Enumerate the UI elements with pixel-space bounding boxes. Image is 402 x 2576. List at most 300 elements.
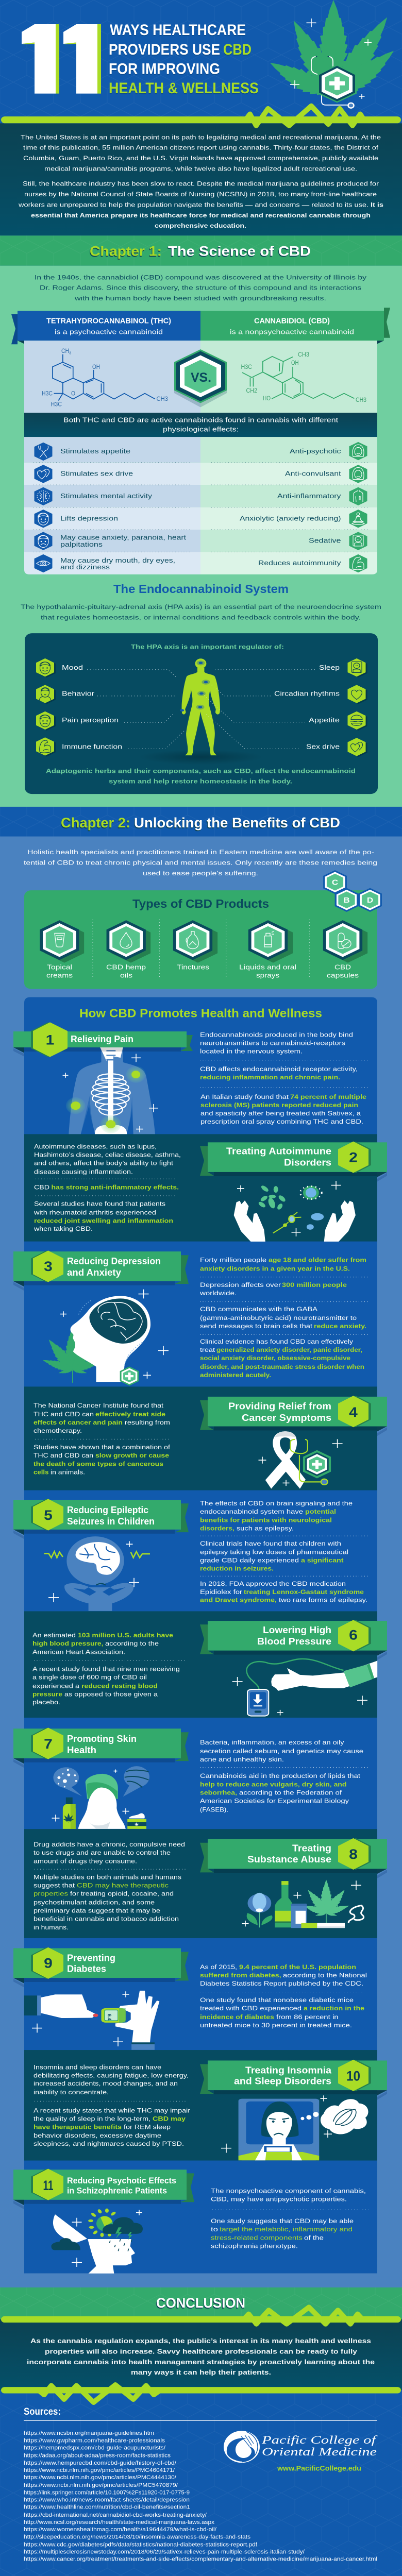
source list: https://link.springer.com/article/10.1007%2Fs11920-017-0775-9 (24, 2490, 190, 2496)
ribbon 8: substance abuse: 8 (349, 1846, 358, 1862)
section 9 illustration: glucose meter and hands: 6.4 (106, 2014, 112, 2021)
panel: THC vs CBD comparison (11, 308, 390, 574)
section 11 text: One study suggests that CBD may be able (211, 2217, 354, 2225)
sources panel (0, 2390, 402, 2576)
ribbon 10: insomnia: and Sleep Disorders (234, 2076, 331, 2087)
Pacific College logo: www.PacificCollege.edu (277, 2464, 361, 2472)
section 3 ribbon: depression and anxiety: 3 (44, 1259, 53, 1275)
section 3 text: (gamma-aminobutyric acid) neurotransmitter to (200, 1314, 357, 1321)
section 8 text: properties (34, 1890, 68, 1897)
section 1 text: Endocannabinoids produced in the body bind (200, 1031, 353, 1038)
section 5 text: endocannabinoid system have (200, 1508, 303, 1515)
section 8 text (34, 1841, 187, 1931)
CBD hex letters: B (343, 896, 350, 905)
section 10 text: inability to concentrate. (34, 2089, 109, 2096)
THC molecule diagram: H3C (51, 401, 62, 408)
regulator labels: Mood (62, 664, 83, 672)
ribbon 1: relieving pain (13, 1022, 193, 1057)
caption band: Both THC and CBD are active cannabinoids found in cannabis with different (63, 416, 338, 424)
ribbon 10: insomnia (200, 2060, 387, 2100)
section 8 text: to use drugs and are unable to control the (34, 1849, 171, 1856)
section 11 ribbon: schizophrenia: in Schizophrenic Patients (67, 2185, 167, 2195)
chapter 1 banner (0, 235, 402, 266)
section 6 text: as opposed to those given a (64, 1690, 158, 1698)
section 5 text: a significant (301, 1556, 344, 1564)
section 3 text: CBD communicates with the GABA (200, 1306, 317, 1313)
product labels: Topical (47, 963, 72, 971)
chapter 1 intro text: Dr. Roger Adams. Since this discovery, the structure of this compound and its interactions (40, 284, 361, 292)
source list: https://www.hempurecbd.com/cbd-guide/history-of-cbd/ (24, 2460, 177, 2466)
regulator labels: Pain perception (62, 717, 119, 724)
THC molecule diagram: H3C (42, 390, 53, 397)
section 5 text: Epidiolex for (200, 1588, 243, 1596)
section 10 text: the quality of sleep in the long-term, (34, 2115, 150, 2122)
section 1 text (200, 1031, 369, 1125)
conclusion text (27, 2337, 375, 2377)
section 3 text: Forty million people (200, 1256, 266, 1263)
section 4 illustration: awareness ribbon and stethoscope (259, 1431, 343, 1489)
heartbeat divider 3 (1, 2385, 401, 2402)
section 6 text: a single dose of 600 mg of CBD oil (32, 1673, 147, 1681)
product hex icons (40, 920, 367, 963)
products heading: Types of CBD Products (132, 897, 269, 910)
Pacific College logo: Oriental Medicine (262, 2446, 377, 2459)
THC molecule diagram: 3 (69, 351, 71, 355)
section 1 text: An Italian study found that (200, 1093, 289, 1100)
CBD molecule diagram (241, 351, 366, 403)
section 9 text: untreated mice to 30 percent in treated mice. (200, 2022, 352, 2029)
section 4 text: cells (34, 1468, 48, 1476)
product labels: capsules (327, 972, 359, 979)
THC effects list: Stimulates mental activity (60, 493, 153, 500)
section 1 text: sclerosis (MS) patients reported reduced pain (200, 1101, 358, 1109)
section 10 text: for REM sleep (124, 2123, 171, 2130)
caption band: physiological effects: (163, 426, 239, 433)
section 4 text: effects of cancer and pain (34, 1419, 123, 1426)
intro paragraph 1: time of this publication, 55 million American citizens report using cannabis. Thirty-four states, the District of (23, 144, 378, 151)
CBD hex letters: C (332, 878, 339, 887)
HPA heading: The HPA axis is an important regulator of: (131, 643, 284, 650)
intro paragraph 2: Still, the healthcare industry has been slow to react. Despite the medical marijuana guidelines produced for (23, 180, 379, 188)
section 11 text (211, 2187, 368, 2250)
THC ribbon header: TETRAHYDROCANNABINOL (THC) (46, 316, 171, 325)
ribbon 6: blood pressure: Blood Pressure (257, 1636, 331, 1647)
title: CBD (223, 41, 252, 58)
section 1 text: neurotransmitters to cannabinoid-receptors (200, 1039, 345, 1046)
intro paragraph 2: It is (371, 201, 383, 208)
intro paragraph 2: essential that America prepare its healthcare force for medical and recreational cannabis through (31, 212, 371, 219)
ribbon 2: autoimmune (200, 1142, 387, 1182)
THC effects list: and dizziness (60, 564, 110, 571)
ribbon 4: cancer symptoms (200, 1396, 387, 1436)
title: WAYS HEALTHCARE (110, 22, 246, 39)
chapter 1 intro text: with the human body have been studied with groundbreaking results. (74, 295, 326, 302)
CBD ribbon header: CANNABIDIOL (CBD) (254, 316, 330, 325)
section 1 text: and spasticity after being treated with Sativex, a (200, 1110, 361, 1117)
heartbeat divider 1 (1, 106, 401, 126)
section 7 illustration: skincare woman (52, 1766, 149, 1829)
conclusion banner (0, 2287, 402, 2319)
Pacific College logo: Pacific College of (261, 2434, 378, 2447)
section 7 text: according to the Federation of (239, 1789, 342, 1797)
title (109, 22, 259, 96)
section 11 text: CBD, may have antipsychotic properties. (211, 2195, 347, 2202)
source list: https://adaa.org/about-adaa/press-room/facts-statistics (24, 2453, 171, 2459)
section 5 illustration: head with brain and seizure waves (44, 1536, 150, 1611)
section 11 ribbon: schizophrenia (13, 2169, 194, 2209)
source list: https://cbd-international.net/cannabidiol-cbd-works-treating-anxiety/ (24, 2512, 207, 2518)
section 5 ribbon: epileptic seizures: 5 (44, 1508, 53, 1523)
section 1 text: located in the nervous system. (200, 1047, 303, 1055)
section 5 ribbon: epileptic seizures: Reducing Epileptic (67, 1505, 148, 1516)
chapter 1 heading: Chapter 1: (90, 244, 162, 259)
regulator labels: Behavior (62, 690, 94, 698)
big number 11 (22, 24, 101, 94)
THC effects list: Stimulates appetite (60, 448, 130, 455)
section 4 text: THC and CBD can (34, 1452, 93, 1459)
section 9 ribbon: diabetes (13, 1947, 189, 1988)
section 4 text: THC and CBD can (34, 1411, 94, 1418)
section 3 ribbon: depression and anxiety: and Anxiety (67, 1267, 121, 1278)
section 9 text: a reduction in the (304, 2005, 364, 2012)
section 8 text: psychostimulant addiction, and some (34, 1899, 155, 1906)
CBD effects list: Anti-psychotic (290, 448, 341, 455)
ribbon 8: substance abuse: Treating (292, 1843, 331, 1854)
section 4 text: slow growth or cause (95, 1452, 169, 1459)
section heading: How CBD Promotes Health and Wellness (79, 1007, 322, 1020)
CBD ribbon header (200, 308, 390, 344)
ribbon 4: cancer symptoms: Providing Relief from (228, 1401, 331, 1412)
section 9 text: Diabetes Statistics Report published by the CDC. (200, 1980, 363, 1987)
ribbon 6: blood pressure: 6 (349, 1628, 358, 1643)
chapter 2 heading: Unlocking the Benefits of CBD (134, 815, 340, 831)
CBD effects list (240, 448, 342, 567)
section 7 text: secretion called sebum, and genetics may cause (200, 1748, 363, 1755)
ribbon 6: blood pressure (200, 1620, 387, 1660)
source list: http://www.ncsl.org/research/health/state-medical-marijuana-laws.aspx (24, 2520, 214, 2526)
section 5 text: grade CBD daily experienced (200, 1556, 299, 1564)
section 6 panel (24, 1611, 387, 1718)
section 11 text: stress-related components (211, 2234, 303, 2242)
section 3 text: treat (200, 1346, 215, 1353)
section 8 text: preliminary data suggest that it may be (34, 1907, 160, 1914)
source list: https://www.ncbi.nlm.nih.gov/pmc/articles/PMC4604171/ (24, 2468, 175, 2473)
title: HEALTH & WELLNESS (109, 80, 259, 96)
adaptogenic text: Adaptogenic herbs and their components, such as CBD, affect the endocannabinoid (46, 767, 356, 774)
section 5 text: benefits for patients with neurological (200, 1516, 332, 1523)
section 10 text: Insomnia and sleep disorders can have (34, 2063, 161, 2071)
intro paragraph 1: Columbia, Guam, Puerto Rico, and the U.S. Virgin Islands have approved comprehensive, publicly available (23, 155, 378, 162)
caption band (24, 413, 377, 437)
section 10 text: A recent study states that while THC may impair (34, 2107, 191, 2114)
section 8 text: amount of drugs they consume. (34, 1857, 137, 1865)
ribbon 2: autoimmune: Disorders (284, 1158, 331, 1168)
section 4 text: Studies have shown that a combination of (34, 1444, 170, 1451)
product labels: oils (120, 972, 132, 979)
source list: https://www.ncbi.nlm.nih.gov/pmc/articles/PMC4444130/ (24, 2475, 177, 2481)
CBD ribbon header: is a nonpsychoactive cannabinoid (230, 328, 354, 336)
section 8 text: Multiple studies on both animals and humans (34, 1873, 181, 1880)
section 5 text: two rare forms of epilepsy. (279, 1596, 367, 1604)
regulator labels: Appetite (309, 717, 340, 724)
chapter 2 intro text: tential of CBD to treat chronic physical and mental issues. Only recently are these remedies being (24, 859, 377, 866)
section 8 text: beneficial in cannabis and tobacco addiction (34, 1915, 179, 1922)
product labels: Tinctures (177, 963, 209, 971)
CBD molecule diagram: OH (291, 360, 299, 366)
section 6 text: experienced a (32, 1682, 80, 1689)
section 9 text: 9.4 percent of the U.S. population (239, 1963, 356, 1971)
section 5 text (200, 1500, 368, 1604)
source list: https://hempmedspx.com/cbd-guide-acupuncturists/ (24, 2445, 166, 2451)
CBD molecule diagram: CH2 (246, 387, 257, 394)
section 3 text: anxiety disorders in a given year in the U.S. (200, 1265, 350, 1272)
VS badge (174, 349, 227, 407)
endocannabinoid system heading: The Endocannabinoid System (113, 583, 289, 596)
right regulators icons (347, 658, 367, 757)
section 11 text: of the (304, 2234, 324, 2242)
section 11 ribbon: schizophrenia: 11 (43, 2178, 53, 2194)
chapter 1 heading: The Science of CBD (168, 244, 311, 259)
section 3 text: generalized anxiety disorder, panic disorder, (216, 1346, 362, 1353)
section 4 text: effectively treat side (95, 1411, 165, 1418)
section 7 ribbon: skin health (13, 1727, 189, 1768)
VS badge: VS. (191, 370, 211, 384)
intro paragraph 2: nurses by the National Council of State Boards of Nursing (NCSBN) in 2018, too many front-line healthcare (24, 191, 377, 198)
section 3 text: reduce anxiety. (314, 1323, 366, 1330)
section 7 text: American Societies for Experimental Biology (200, 1797, 349, 1804)
CBD molecule diagram: H3C (241, 364, 252, 370)
section 7 text: acne and unhealthy skin. (200, 1756, 284, 1763)
section 3 text (199, 1256, 368, 1379)
section 10 text: CBD may (153, 2115, 186, 2122)
section 3 text: disorder, and post-traumatic stress disorder when (200, 1363, 364, 1370)
section 3 illustration: head with brain and leaf (41, 1290, 169, 1386)
section 9 text: As of 2015, (200, 1963, 237, 1971)
section 3 text: worldwide. (199, 1290, 237, 1297)
section 3 text: social anxiety disorder, obsessive-compulsive (200, 1354, 350, 1362)
ribbon 8: substance abuse (200, 1838, 387, 1878)
source list: https://www.gwpharm.com/healthcare-professionals (24, 2438, 165, 2444)
section 6 text: An estimated (32, 1632, 76, 1639)
section 2 text: has strong anti-inflammatory effects. (51, 1183, 179, 1191)
ribbon 10: insomnia: Treating Insomnia (245, 2065, 332, 2076)
section 10 text (34, 2063, 191, 2147)
source list: https://www.cancer.org/treatment/treatments-and-side-effects/complementary-and-alternative-medicine/marijuana-and-cancer.html (24, 2556, 377, 2563)
regulator labels: Circadian rhythms (274, 690, 340, 698)
section 8 panel (24, 1829, 387, 1938)
section 3 text: age 18 and older suffer from (269, 1256, 366, 1263)
CBD hex letters: D (367, 896, 373, 905)
section 2 text: CBD (34, 1183, 49, 1191)
CBD effects list: Anti-convulsant (285, 470, 341, 478)
intro paragraph 1: The United States is at an important point on its path to legalizing medical and recreational marijuana. At the (21, 133, 381, 141)
section 2 panel (24, 1134, 387, 1242)
section 3 text: 300 million people (282, 1281, 347, 1289)
intro paragraph 2 (18, 180, 383, 229)
adaptogenic text: system and help restore homeostasis in the body. (109, 777, 292, 785)
title: PROVIDERS USE (109, 41, 220, 58)
section 3 ribbon: depression and anxiety (13, 1250, 189, 1291)
ribbon 1: relieving pain: Relieving Pain (71, 1034, 133, 1045)
header (0, 0, 402, 123)
section 2 text: with rheumatoid arthritis experienced (34, 1209, 156, 1216)
section 6 text: high blood pressure, (32, 1640, 103, 1647)
section 9 text (200, 1963, 367, 2029)
section 8 text: suggest that (34, 1882, 75, 1889)
THC effects list (60, 448, 186, 571)
product labels: CBD hemp (106, 963, 146, 971)
conclusion text: incorporate cannabis into health management strategies by proactively learning about the (27, 2359, 375, 2366)
section 2 text: Autoimmune diseases, such as lupus, (34, 1143, 157, 1150)
section 4 text: chemotherapy. (34, 1427, 82, 1434)
section 10 text: sleepiness, and nightmares caused by PTSD. (34, 2140, 184, 2147)
section 4 text: The National Cancer Institute found that (34, 1402, 163, 1409)
adaptogenic text (46, 767, 356, 785)
section 7 text (200, 1739, 368, 1813)
section 4 text: in animals. (51, 1468, 85, 1476)
illustration: cannabis leaf with medical badge and stethoscope (264, 0, 401, 108)
regulator labels: Sex drive (306, 743, 340, 751)
section 7 text: (FASEB). (200, 1806, 228, 1813)
section 11 text: target the metabolic, inflammatory and (220, 2226, 353, 2233)
source list: https://www.womenshealthmag.com/health/a19644479/what-is-cbd-oil/ (24, 2527, 217, 2533)
THC effects list: May cause anxiety, paranoia, heart (60, 534, 186, 541)
section 9 text: One study found that nonobese diabetic mice (200, 1996, 354, 2004)
ribbon 2: autoimmune: Treating Autoimmune (226, 1146, 331, 1157)
product labels: CBD (334, 963, 351, 971)
section 3 text: administered acutely. (200, 1371, 271, 1379)
section 9 text: from 86 percent in (276, 2013, 339, 2021)
section 9 ribbon: diabetes: Diabetes (67, 1964, 106, 1974)
endocannabinoid text (21, 603, 381, 621)
endocannabinoid text: that regulates homeostasis, or internal conditions and feedback controls within the body. (41, 614, 361, 621)
section 3 ribbon: depression and anxiety: Reducing Depression (67, 1256, 161, 1267)
heartbeat divider 2 (1, 2307, 401, 2324)
section 11 text: The nonpsychoactive component of cannabis, (211, 2187, 366, 2194)
section 3 text: send messages to brain cells that (200, 1323, 312, 1330)
THC effects list: Lifts depression (60, 515, 118, 522)
section 6 text: according to the (105, 1640, 159, 1647)
chapter 1 body (0, 266, 402, 807)
section 10 text: debilitating effects, causing fatigue, low energy, (34, 2072, 189, 2079)
section 2 text: reduced joint swelling and inflammation (34, 1217, 173, 1224)
section 4 text: resulting from (125, 1419, 170, 1426)
section 1 text: 74 percent of multiple (290, 1093, 366, 1100)
section 7 ribbon: skin health: Health (67, 1745, 96, 1756)
section 11 ribbon: schizophrenia: Reducing Psychotic Effects (67, 2176, 176, 2185)
chapter 2 heading: Chapter 2: (61, 815, 130, 831)
THC effects list: Stimulates sex drive (60, 470, 133, 478)
CBD molecule diagram: HO (263, 395, 271, 402)
section 10 panel (24, 2050, 387, 2161)
section 4 text: the death of some types of cancerous (34, 1460, 163, 1467)
section 3 text: Depression affects over (200, 1281, 281, 1289)
CBD effects list: Anti-inflammatory (277, 493, 342, 500)
section 1 illustration: skeleton and pain points (63, 1047, 158, 1134)
intro paragraph 2: comprehensive education. (155, 222, 246, 229)
ribbon 8: substance abuse: Substance Abuse (247, 1854, 331, 1865)
chapter 1 intro text: In the 1940s, the cannabidiol (CBD) compound was discovered at the University of Illinois by (35, 274, 366, 281)
product labels (46, 963, 359, 979)
product labels: Liquids and oral (239, 963, 296, 971)
section 5 text: In 2018, FDA approved the CBD medication (200, 1580, 346, 1587)
CBD molecule diagram: CH3 (298, 351, 309, 358)
section 5 text: reduction in seizures. (200, 1565, 274, 1572)
section 7 text: help to reduce acne vulgaris, dry skin, and (200, 1781, 346, 1788)
section 9 text: treated with CBD experienced (200, 2005, 301, 2012)
icons: THC effects (34, 443, 53, 572)
section 7 text: Bacteria, inflammation, an excess of an oily (200, 1739, 344, 1746)
Pacific College logo (224, 2431, 378, 2472)
section 6 text: A recent study found that nine men receiving (32, 1665, 180, 1672)
CBD effects list: Anxiolytic (anxiety reducing) (240, 515, 341, 522)
panel: HPA axis (25, 633, 378, 794)
section 6 text: American Heart Association. (32, 1648, 125, 1656)
section 5 text: such as epilepsy. (237, 1524, 294, 1532)
source list: https://multiplesclerosisnewstoday.com/2018/06/29/sativex-relieves-pain-multiple-sclerosis-italian-study/ (24, 2549, 305, 2555)
endocannabinoid text: The hypothalamic-pituitary-adrenal axis (HPA axis) is an essential part of the neuroendocrine system (21, 603, 381, 611)
section 11 text: schizophrenia phenotype. (211, 2242, 298, 2250)
section 1 text: reducing inflammation and chronic pain. (200, 1074, 340, 1081)
section 6 text: placebo. (32, 1699, 60, 1706)
section 5 text: and Dravet syndrome, (200, 1596, 277, 1604)
ribbon 10: insomnia: 10 (346, 2069, 360, 2084)
regulator labels (62, 664, 340, 751)
title: FOR IMPROVING (109, 60, 220, 77)
chapter 2 intro text: Holistic health specialists and practitioners trained in Eastern medicine are well aware of the po- (27, 849, 374, 856)
section 1 text: prescription oral spray combining THC and CBD. (200, 1118, 363, 1125)
THC ribbon header (11, 311, 200, 344)
section 9 text: according to the National (283, 1972, 367, 1979)
section 10 illustration: woman at window with thought cloud (221, 2095, 368, 2160)
conclusion text: As the cannabis regulation expands, the public’s interest in its many health and wellness (30, 2337, 371, 2345)
section 4 text (34, 1402, 171, 1476)
section 10 text: increased accidents, mood changes, and an (34, 2080, 178, 2087)
section 5 text: potential (305, 1508, 336, 1515)
section 2 text: when taking CBD. (34, 1225, 93, 1232)
section 10 text: have therapeutic benefits (34, 2123, 122, 2130)
section 9 ribbon: diabetes: Preventing (67, 1953, 115, 1963)
section 10 text: behavior disorders, excessive daytime (34, 2132, 161, 2139)
CBD effects list: Reduces autoimmunity (258, 560, 342, 567)
section 2 text (34, 1143, 181, 1232)
panel: types of CBD products (24, 870, 382, 989)
section 3 text: Clinical evidence has found CBD can effectively (200, 1338, 353, 1345)
THC effects list: May cause dry mouth, dry eyes, (60, 557, 175, 565)
THC molecule diagram: CH3 (157, 396, 168, 402)
THC molecule diagram: OH (92, 364, 100, 370)
chapter 2 banner (0, 807, 402, 837)
intro paragraph 1 (21, 133, 381, 172)
source list: https://www.who.int/news-room/fact-sheets/detail/depression (24, 2497, 190, 2503)
regulator labels: Sleep (319, 664, 340, 672)
section 5 text: epilepsy taking low doses of pharmaceutical (200, 1548, 348, 1555)
section 6 text: reduced resting blood (81, 1682, 158, 1689)
section 2 text: disease causing inflammation. (34, 1168, 133, 1175)
section 5 ribbon: epileptic seizures: Seizures in Children (67, 1516, 155, 1527)
source list (24, 2431, 377, 2563)
ribbon 2: autoimmune: 2 (349, 1150, 358, 1165)
section 8 text: for treating opioid, cocaine, and (70, 1890, 174, 1897)
section 6 illustration: arm with blood pressure cuff (232, 1659, 377, 1716)
conclusion text: properties will also increase. Savvy healthcare professionals can be ready to fully (45, 2348, 357, 2355)
product labels: sprays (256, 972, 279, 979)
section 2 text: and others, affect the body’s ability to fight (34, 1159, 173, 1166)
regulator labels: Immune function (62, 743, 122, 751)
section 8 text: CBD may have therapeutic (77, 1882, 169, 1889)
section 6 text: pressure (32, 1690, 62, 1698)
section 6 text (32, 1632, 187, 1706)
